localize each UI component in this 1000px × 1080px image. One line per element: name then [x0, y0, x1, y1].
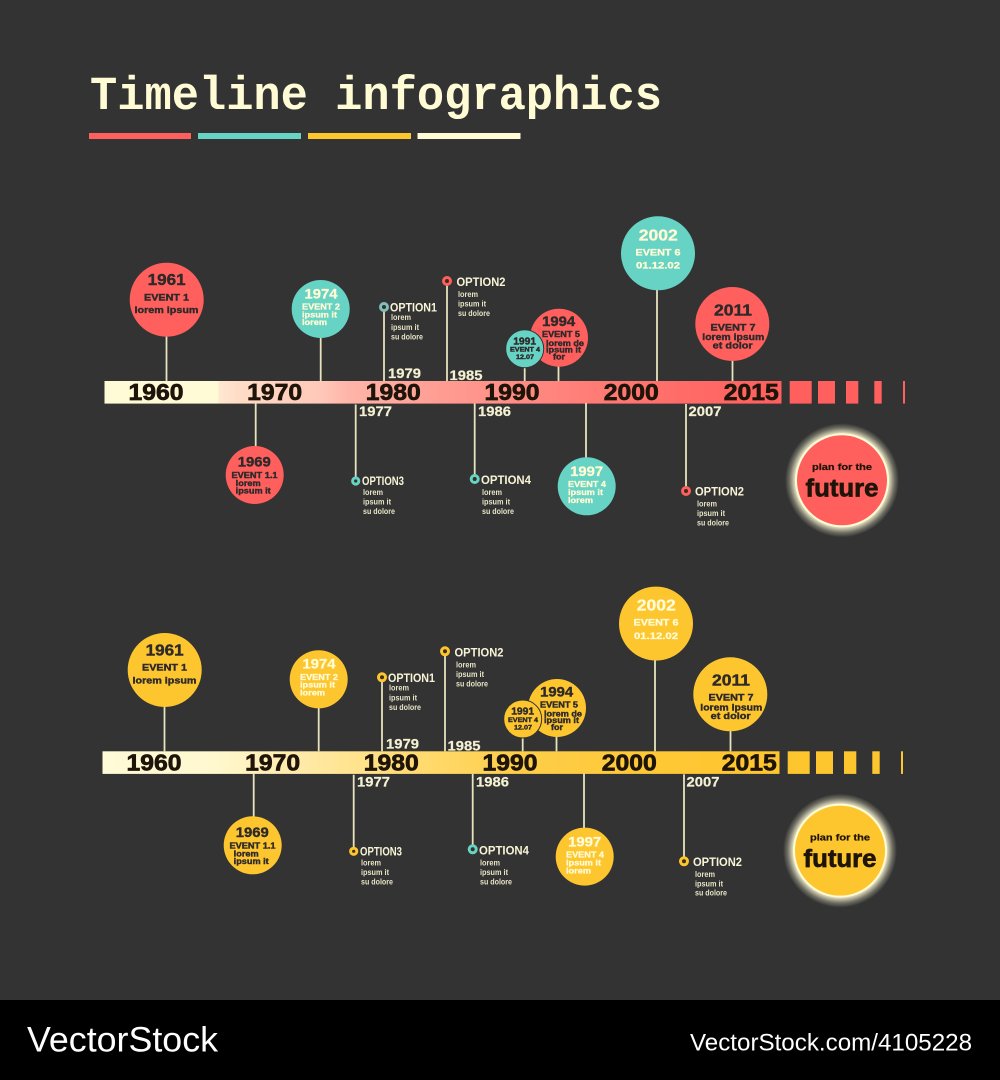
- option 1986: [469, 774, 530, 886]
- event 2011: EVENT 7: [708, 693, 754, 704]
- event 1961: lorem ipsum: [132, 675, 196, 686]
- event 1997: ipsum it: [568, 488, 603, 497]
- option 2007: OPTION2: [693, 857, 742, 869]
- event 2011: et dolor: [713, 341, 753, 352]
- event 1974: [292, 280, 350, 381]
- event 1969: [224, 773, 282, 874]
- option 1986: lorem: [480, 858, 500, 867]
- option 1986: 1986: [476, 774, 510, 789]
- bar year labels: 2015: [722, 749, 777, 775]
- event 1974: lorem: [302, 318, 327, 327]
- option 1979: OPTION1: [388, 673, 436, 685]
- option 1985: ipsum it: [458, 300, 486, 308]
- option 1977: su dolore: [363, 507, 395, 516]
- event 1994: lorem de: [544, 709, 583, 718]
- event 1994: ipsum it: [544, 716, 579, 725]
- option 1979: [378, 673, 436, 751]
- event 1991: [506, 330, 544, 381]
- option 1979: 1979: [388, 366, 421, 381]
- event 1969: 1969: [238, 455, 271, 470]
- option 1985: OPTION2: [454, 647, 504, 659]
- event 1969: lorem: [236, 479, 261, 488]
- event 2002: [619, 587, 693, 751]
- event 1994: ipsum it: [546, 346, 581, 354]
- event 1997: 1997: [570, 464, 603, 479]
- event 1997: EVENT 4: [568, 480, 607, 489]
- timeline bar: [102, 751, 780, 774]
- event 1974: lorem: [300, 688, 325, 697]
- title underline colour bars: [89, 133, 520, 139]
- option 2007: su dolore: [695, 889, 727, 898]
- bar year labels: 2000: [604, 379, 659, 405]
- option 1985: [442, 647, 504, 753]
- event 1997: [558, 403, 616, 515]
- event 1997: lorem: [568, 496, 593, 505]
- option 1979: ipsum it: [389, 693, 417, 702]
- event 2011: [693, 657, 767, 751]
- footer band: [0, 1000, 1000, 1080]
- option 2007: lorem: [697, 500, 717, 509]
- option 1986: 1986: [478, 404, 512, 419]
- event 1994: 1994: [542, 314, 576, 329]
- timeline: yellow: [102, 587, 903, 908]
- option 2007: ipsum it: [695, 879, 723, 888]
- option 1979: 1979: [386, 736, 419, 751]
- event 1969: lorem: [234, 849, 259, 858]
- event 1961: EVENT 1: [142, 663, 188, 674]
- bar year labels: 1960: [126, 749, 182, 775]
- option 1985: OPTION2: [456, 277, 506, 289]
- event 1994: lorem de: [546, 339, 585, 348]
- option 2007: lorem: [695, 870, 715, 879]
- option 2007: 2007: [686, 774, 720, 789]
- fading bar segments: [790, 381, 905, 404]
- option 1985: su dolore: [458, 309, 490, 318]
- event 1997: [556, 773, 614, 886]
- future badge: plan for the: [812, 462, 872, 473]
- event 1961: [128, 633, 202, 751]
- option 1979: lorem: [389, 683, 409, 692]
- event 1969: EVENT 1.1: [232, 471, 278, 480]
- event 1974: ipsum it: [300, 681, 335, 690]
- event 1969: ipsum it: [234, 857, 269, 866]
- bar year labels: [126, 749, 777, 775]
- bar year labels: 1980: [364, 749, 419, 775]
- event 1961: [130, 263, 204, 381]
- option 1986: lorem: [482, 488, 502, 497]
- option 1977: lorem: [363, 488, 383, 497]
- event 1994: EVENT 5: [540, 700, 579, 709]
- option 1977: [353, 404, 404, 516]
- option 1985: su dolore: [456, 679, 488, 688]
- bar year labels: 1970: [245, 749, 300, 775]
- option 1986: OPTION4: [481, 475, 532, 487]
- event 2011: EVENT 7: [710, 322, 756, 333]
- event 1974: EVENT 2: [302, 303, 341, 312]
- event 1974: 1974: [302, 657, 336, 672]
- event 1974: ipsum it: [302, 310, 337, 319]
- option 2007: su dolore: [697, 518, 729, 527]
- bar year labels: 1980: [366, 379, 421, 405]
- event 2011: lorem ipsum: [700, 702, 762, 713]
- event 1994: EVENT 5: [542, 330, 581, 339]
- event 1994: 1994: [540, 684, 574, 699]
- event 2002: 01.12.02: [634, 631, 678, 642]
- event 2002: 2002: [637, 598, 676, 615]
- event 1991: EVENT 4: [510, 347, 540, 354]
- event 2002: 01.12.02: [636, 261, 680, 272]
- bar year labels: 2000: [602, 749, 657, 775]
- option 1977: OPTION3: [360, 846, 402, 858]
- footer image reference: VectorStock.com/4105228: [690, 1030, 972, 1056]
- event 1991: 1991: [513, 335, 536, 347]
- option 1977: ipsum it: [363, 498, 391, 507]
- option 1985: 1985: [448, 738, 481, 753]
- event 1974: EVENT 2: [300, 673, 339, 682]
- option 1985: ipsum it: [456, 670, 484, 679]
- event 1994: [528, 679, 586, 751]
- event 2011: [695, 287, 769, 381]
- bar year labels: 1970: [247, 379, 302, 405]
- bar year labels: 2015: [724, 379, 779, 405]
- option 1979: su dolore: [389, 703, 421, 712]
- option 1985: lorem: [458, 290, 478, 299]
- option 1977: OPTION3: [362, 476, 404, 488]
- event 2002: EVENT 6: [636, 247, 680, 258]
- timeline bar: [104, 381, 782, 404]
- event 1997: ipsum it: [566, 858, 601, 867]
- option 1986: ipsum it: [480, 868, 508, 877]
- option 1986: ipsum it: [482, 498, 510, 507]
- option 1979: lorem: [391, 313, 411, 322]
- event 1969: EVENT 1.1: [230, 841, 276, 850]
- option 1979: [380, 303, 438, 381]
- option 1979: ipsum it: [391, 323, 419, 332]
- event 2011: lorem ipsum: [702, 332, 764, 343]
- event 2002: 2002: [639, 227, 678, 244]
- option 1986: [471, 404, 532, 516]
- event 1997: 1997: [568, 834, 601, 849]
- event 1969: 1969: [236, 825, 269, 840]
- event 1961: 1961: [148, 272, 186, 289]
- event 1961: EVENT 1: [144, 292, 190, 303]
- bar year labels: 1990: [484, 379, 540, 405]
- option 1986: su dolore: [482, 507, 514, 516]
- option 1977: 1977: [357, 774, 390, 789]
- future badge: [785, 423, 899, 537]
- title: Timeline infographics: [90, 70, 662, 124]
- event 2011: 2011: [712, 673, 750, 690]
- bar year labels: 1960: [128, 379, 184, 405]
- option 1985: 1985: [450, 368, 483, 383]
- future badge: future: [804, 845, 877, 873]
- event 1974: [290, 650, 348, 751]
- future badge: [783, 794, 897, 908]
- bar year labels: 1990: [482, 749, 538, 775]
- event 1961: lorem ipsum: [134, 305, 198, 316]
- event 1969: ipsum it: [236, 487, 271, 496]
- future badge: plan for the: [810, 832, 870, 843]
- option 1979: OPTION1: [390, 303, 438, 315]
- bar year labels: [128, 379, 779, 405]
- event 2002: EVENT 6: [634, 618, 678, 629]
- event 2011: et dolor: [711, 711, 751, 722]
- event 1974: 1974: [304, 286, 338, 301]
- event 2002: [621, 216, 695, 381]
- event 1994: for: [551, 723, 563, 732]
- future badge: future: [806, 475, 879, 503]
- option 2007: [682, 404, 744, 527]
- timeline: red and teal: [104, 216, 905, 537]
- event 1994: for: [553, 352, 565, 362]
- option 1979: su dolore: [391, 332, 423, 342]
- event 1994: [530, 309, 588, 381]
- option 1986: OPTION4: [479, 845, 530, 857]
- event 1991: 12.07: [514, 724, 532, 731]
- footer logo: VectorStock: [27, 1020, 219, 1060]
- event 1997: lorem: [566, 866, 591, 875]
- option 2007: 2007: [688, 404, 722, 419]
- fading bar segments: [788, 751, 903, 774]
- option 1985: [444, 277, 506, 383]
- option 1986: su dolore: [480, 877, 512, 886]
- option 1977: ipsum it: [361, 868, 389, 877]
- event 1991: EVENT 4: [508, 717, 538, 724]
- event 1991: [504, 700, 542, 751]
- option 1977: lorem: [361, 858, 381, 867]
- event 1991: 12.07: [516, 354, 534, 361]
- event 1997: EVENT 4: [566, 850, 605, 859]
- event 1991: 1991: [511, 706, 534, 718]
- option 1977: 1977: [359, 404, 392, 419]
- event 2011: 2011: [714, 302, 752, 319]
- event 1961: 1961: [146, 642, 184, 659]
- option 2007: ipsum it: [697, 509, 725, 518]
- option 2007: [680, 774, 742, 898]
- option 1977: [351, 774, 402, 886]
- option 1977: su dolore: [361, 877, 393, 886]
- option 1985: lorem: [456, 660, 476, 669]
- option 2007: OPTION2: [695, 487, 744, 499]
- event 1969: [226, 403, 284, 504]
